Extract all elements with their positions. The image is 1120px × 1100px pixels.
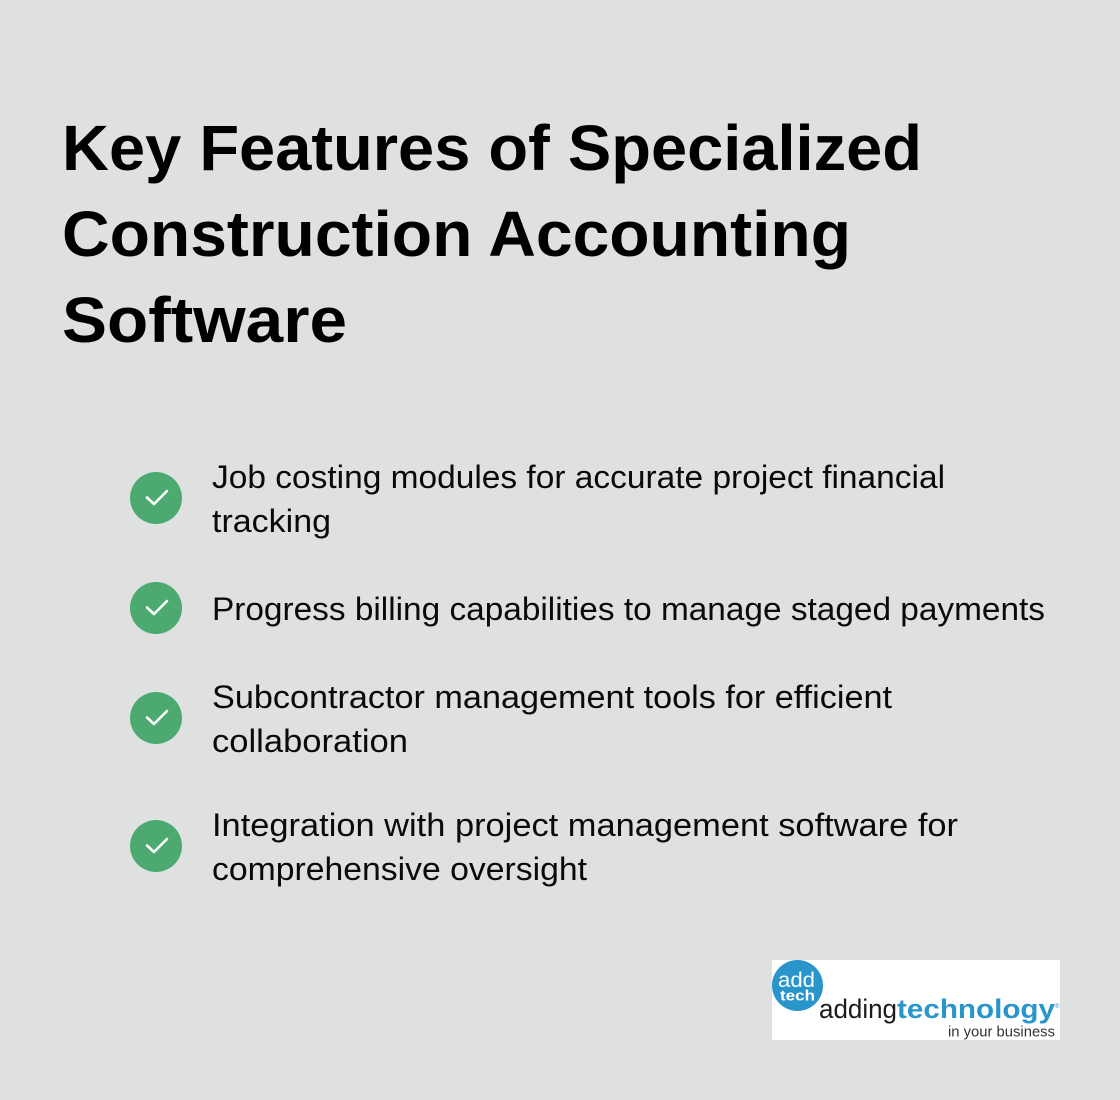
logo wordmark: technology (897, 994, 1055, 1024)
item: progress billing: Progress billing capabilities to manage staged payments (212, 591, 1045, 627)
item: integration (130, 807, 958, 887)
item: integration: Integration with project management software for (212, 807, 958, 843)
logo wordmark: ® (1055, 1003, 1060, 1010)
title: Software (62, 284, 347, 356)
logo: adding technology (772, 960, 1060, 1040)
feature list (130, 459, 1045, 887)
item: progress billing (130, 582, 1045, 634)
logo tagline: in your business (948, 1024, 1055, 1040)
logo badge: add (778, 969, 815, 992)
item: subcontractor management (130, 679, 892, 759)
item: job costing: tracking (212, 503, 331, 539)
title: Construction Accounting (62, 198, 851, 270)
item: subcontractor management: collaboration (212, 723, 408, 759)
item: integration: comprehensive oversight (212, 851, 587, 887)
logo wordmark: adding (819, 994, 897, 1024)
logo badge (772, 960, 823, 1011)
logo wordmark (819, 994, 1060, 1024)
item: job costing: Job costing modules for accurate project financial (212, 459, 945, 495)
title (62, 112, 922, 356)
item: subcontractor management: Subcontractor management tools for efficient (212, 679, 892, 715)
logo badge: tech (780, 988, 815, 1004)
item: job costing (130, 459, 945, 539)
title: Key Features of Specialized (62, 112, 922, 184)
